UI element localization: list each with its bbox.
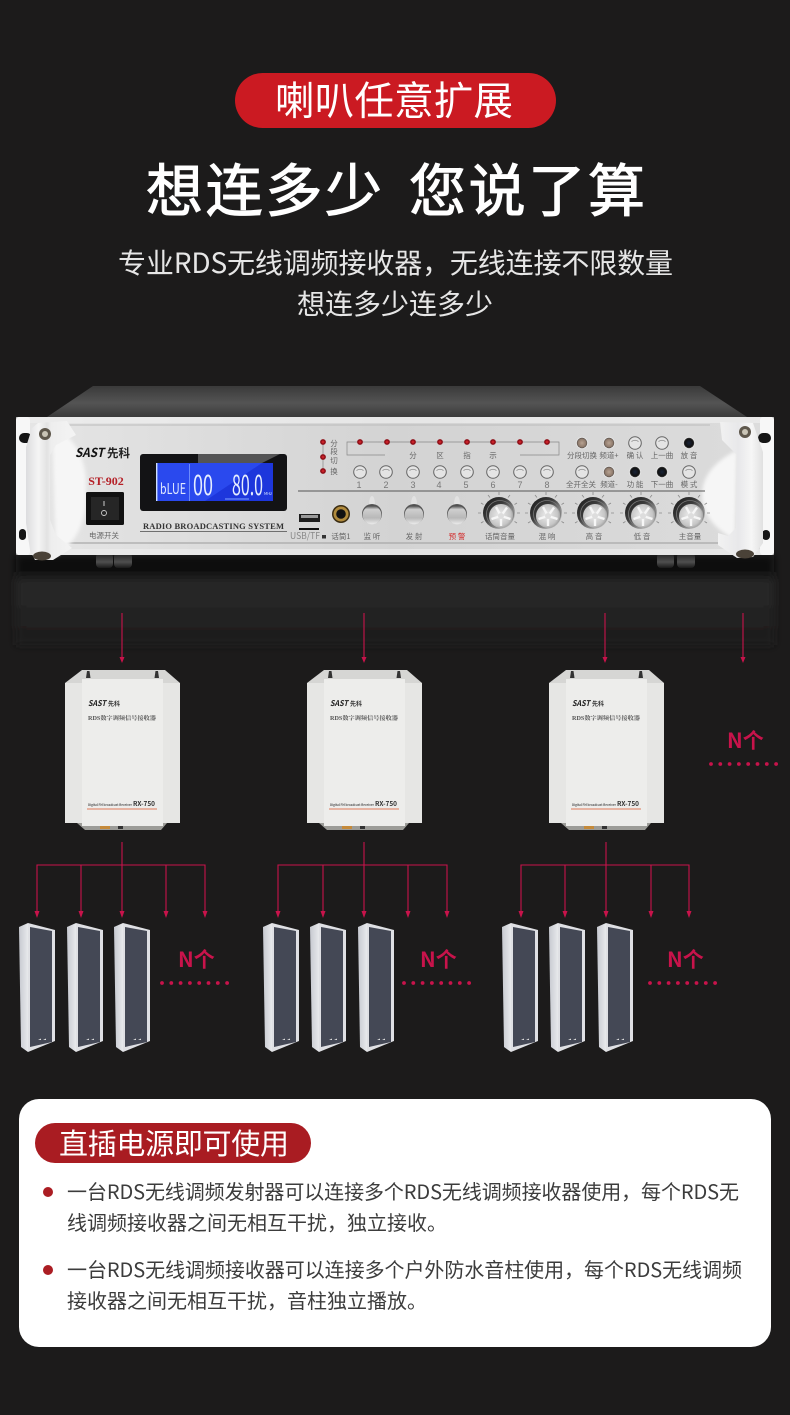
zone indicators xyxy=(320,438,559,477)
function buttons: 放 音 xyxy=(681,450,698,461)
mic jack: 话筒1 xyxy=(331,531,351,542)
LCD display xyxy=(140,454,287,511)
brand logo xyxy=(75,442,130,461)
model number: ST-902 xyxy=(88,474,124,488)
brand logo: 先科 xyxy=(107,445,130,461)
zone indicators: 换 xyxy=(330,466,338,477)
function buttons: 全开全关 xyxy=(566,479,596,490)
N个 more speakers, group 2 xyxy=(404,944,471,983)
receiver 1: RX-750 xyxy=(133,798,155,808)
zone buttons 1-8: 6 xyxy=(490,480,496,490)
large knobs: 主音量 xyxy=(679,531,702,542)
receiver 2 xyxy=(307,670,422,830)
zone indicators: 示 xyxy=(489,450,497,461)
function buttons: 上一曲 xyxy=(651,450,673,461)
zone indicators: 分 xyxy=(409,450,417,461)
brand logo: SAST xyxy=(75,442,106,461)
function buttons: 确 认 xyxy=(627,450,644,461)
function buttons: 下一曲 xyxy=(651,479,673,490)
function buttons: 分段切换 xyxy=(567,450,597,461)
receiver 3: RX-750 xyxy=(617,798,639,808)
panel heading pill: 直插电源即可使用 xyxy=(59,1121,289,1163)
N个 more speakers, group 2: N个 xyxy=(420,944,457,974)
amplifier feet xyxy=(96,553,695,568)
bullet note 2: 一台RDS无线调频接收器可以连接多个户外防水音柱使用，每个RDS无线调频 xyxy=(67,1254,742,1283)
right handle xyxy=(702,422,763,558)
function buttons: 频道- xyxy=(600,479,618,490)
panel: usage notes xyxy=(19,1099,771,1347)
power switch xyxy=(86,492,124,541)
LCD display: MHz xyxy=(264,491,272,497)
receiver 2: Digital FM broadcast Receiver xyxy=(330,802,375,807)
receiver 3: SAST xyxy=(572,698,592,709)
divider line xyxy=(298,490,705,492)
subtitle: 想连多少连多少 xyxy=(297,283,493,323)
receiver 3 xyxy=(549,670,664,830)
N个 more speakers, group 3: N个 xyxy=(667,944,704,974)
receiver 1: RDS数字调频信号接收器 xyxy=(88,714,156,722)
receiver 3: Digital FM broadcast Receiver xyxy=(572,802,617,807)
N个 more speakers, group 1 xyxy=(162,944,229,983)
power switch: 电源开关 xyxy=(89,530,119,541)
arrow tree group 3 xyxy=(518,842,692,918)
LCD display: 00 xyxy=(193,464,213,503)
arrow tree group 2 xyxy=(276,842,450,918)
small knobs: 预 警 xyxy=(449,531,466,542)
receiver 1 xyxy=(65,670,180,830)
handle mounting slots xyxy=(19,433,771,540)
left handle xyxy=(26,421,86,560)
zone indicators: 段 xyxy=(330,446,338,457)
small knobs: 发 射 xyxy=(406,531,423,542)
title: 想连多少 xyxy=(146,146,382,228)
receiver 1: 先科 xyxy=(108,699,120,708)
subtitle: 专业RDS无线调频接收器，无线连接不限数量 xyxy=(118,242,673,282)
N个 more speakers, group 1: N个 xyxy=(178,944,215,974)
large knobs xyxy=(478,492,710,542)
bullet note 1: 线调频接收器之间无相互干扰，独立接收。 xyxy=(67,1207,447,1236)
LCD display: bLUE xyxy=(160,478,186,499)
title: 您说了算 xyxy=(409,146,645,228)
receiver 3: RDS数字调频信号接收器 xyxy=(572,714,640,722)
zone buttons 1-8: 2 xyxy=(383,480,389,490)
USB port xyxy=(290,514,326,542)
mic jack xyxy=(331,505,351,542)
N个 more receivers xyxy=(711,725,778,764)
bullet note 1 xyxy=(43,1176,739,1236)
bullet note 2 xyxy=(43,1254,742,1314)
amplifier shadow and reflection xyxy=(16,555,774,645)
receiver 3: 先科 xyxy=(592,699,604,708)
N个 more receivers: N个 xyxy=(727,725,764,755)
zone indicators: 指 xyxy=(463,450,471,461)
speakers group 3 xyxy=(502,923,633,1052)
N个 more speakers, group 3 xyxy=(650,944,717,983)
large knobs: 混 响 xyxy=(539,531,555,542)
system caption: RADIO BROADCASTING SYSTEM xyxy=(143,521,284,531)
zone buttons 1-8: 4 xyxy=(436,480,442,490)
subtitle xyxy=(118,242,673,323)
function buttons xyxy=(566,437,698,490)
zone buttons 1-8 xyxy=(354,466,553,490)
large knobs: 高 音 xyxy=(586,531,603,542)
large knobs: 低 音 xyxy=(634,531,651,542)
front panel xyxy=(16,417,774,555)
arrow tree group 1 xyxy=(34,842,208,918)
heading pill: 喇叭任意扩展: 喇叭任意扩展 xyxy=(275,70,513,127)
receiver 2: SAST xyxy=(330,698,350,709)
title xyxy=(146,146,645,228)
zone buttons 1-8: 5 xyxy=(463,480,469,490)
receiver 2: RDS数字调频信号接收器 xyxy=(330,714,398,722)
large knobs: 话筒音量 xyxy=(485,531,515,542)
LCD display: 80.0 xyxy=(232,464,263,503)
zone indicators: 切 xyxy=(330,455,338,466)
USB port: USB/TF xyxy=(290,529,320,542)
function buttons: 频道+ xyxy=(599,450,619,461)
small knobs: 监 听 xyxy=(364,531,381,542)
zone indicators: 区 xyxy=(436,450,444,461)
speakers group 1 xyxy=(19,923,150,1052)
receiver 1: SAST xyxy=(88,698,108,709)
zone buttons 1-8: 7 xyxy=(517,480,523,490)
zone buttons 1-8: 1 xyxy=(356,480,362,490)
small knobs xyxy=(362,496,467,542)
bullet note 1: 一台RDS无线调频发射器可以连接多个RDS无线调频接收器使用，每个RDS无 xyxy=(67,1176,739,1205)
receiver 2: 先科 xyxy=(350,699,362,708)
zone indicators: 分 xyxy=(330,438,338,449)
receiver 2: RX-750 xyxy=(375,798,397,808)
speakers group 2 xyxy=(263,923,394,1052)
bullet note 2: 接收器之间无相互干扰，音柱独立播放。 xyxy=(67,1285,427,1314)
function buttons: 模 式 xyxy=(681,479,698,490)
zone buttons 1-8: 3 xyxy=(410,480,416,490)
arrows: transmitter to receivers xyxy=(120,613,746,663)
amplifier top cover xyxy=(47,386,747,417)
amplifier: RDS transmitter ST-902 xyxy=(16,386,774,645)
zone buttons 1-8: 8 xyxy=(544,480,550,490)
receiver 1: Digital FM broadcast Receiver xyxy=(88,802,133,807)
function buttons: 功 能 xyxy=(627,479,644,490)
